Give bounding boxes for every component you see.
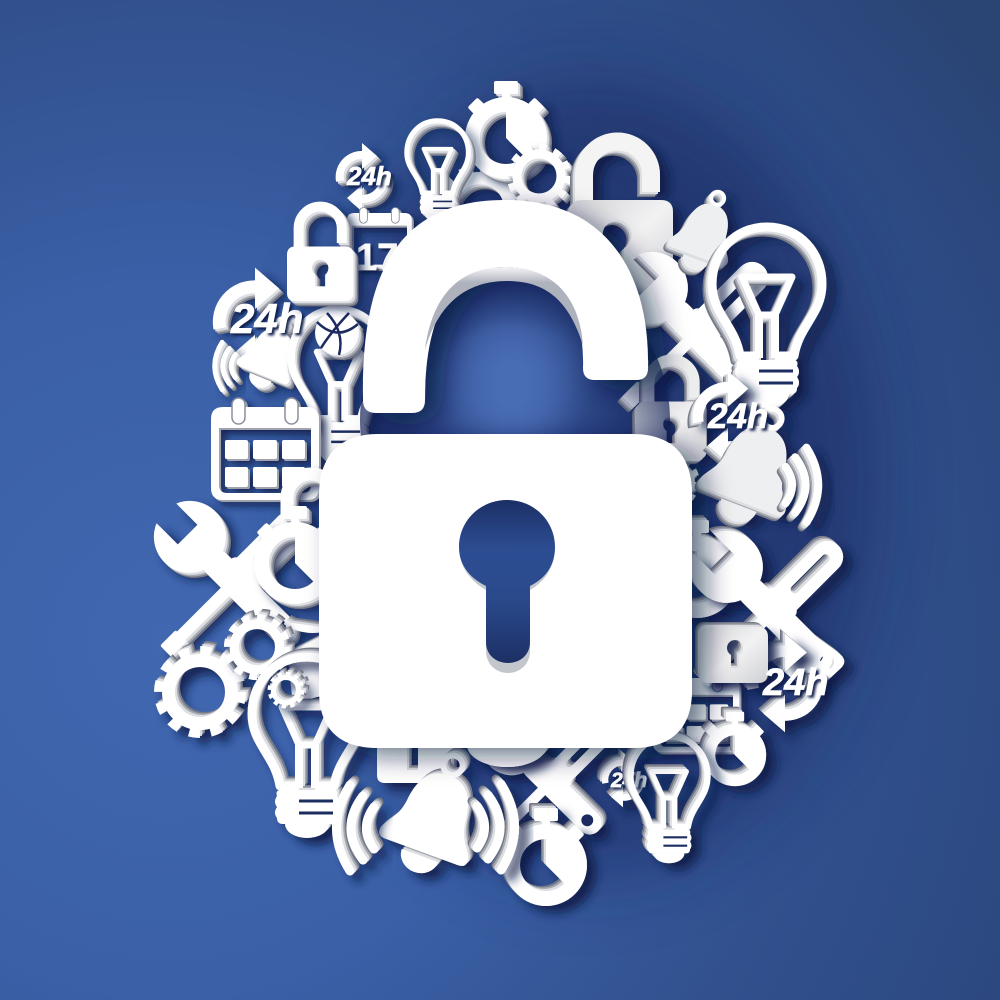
- icon: small lock top left: [287, 207, 353, 301]
- icon: gear medium lower left: [227, 617, 287, 677]
- icon: open lock top right: [570, 141, 673, 293]
- icon: 24h ring top: [340, 143, 384, 211]
- icon: gear top: [510, 147, 568, 205]
- icon: stopwatch lower right: [706, 712, 764, 780]
- cluster shadow: [305, 80, 875, 880]
- icon: 24h ring right: [698, 371, 758, 463]
- text: calendar date: 17: [356, 237, 398, 279]
- icon: tools right: [678, 518, 854, 695]
- icon: bell bottom: [370, 740, 500, 888]
- icon: calendar left: [211, 398, 319, 500]
- text: 24h top: 24h: [346, 161, 392, 191]
- icon: bulb lower left: [252, 657, 362, 838]
- padlock keyhole: [459, 500, 555, 673]
- icon: large gear top: [441, 169, 519, 247]
- icon: small gear behind right: [647, 457, 697, 507]
- icon: bell top right: [662, 181, 749, 280]
- padlock body: [319, 434, 692, 748]
- icon: small lock lower right: [700, 627, 768, 683]
- icon: sound waves right: [786, 448, 818, 522]
- shackle inner wall: [425, 267, 583, 350]
- icon: bulb bottom right: [630, 736, 708, 863]
- padlock shackle: [363, 200, 648, 413]
- icon: tools left: [141, 488, 317, 665]
- icon: white bump under lock: [467, 723, 547, 767]
- text: 24h bottom: 24h: [610, 769, 647, 792]
- icon: 24h ring lower right: [753, 634, 817, 732]
- icon: bulb left: [291, 309, 385, 463]
- icon: gear large lower left: [159, 651, 241, 733]
- icon: arcs lower left: [285, 622, 335, 700]
- main padlock: [319, 200, 692, 748]
- icon: sound waves bottom left: [336, 785, 374, 871]
- icon: small lock right: [637, 360, 707, 459]
- icon: globe in bulb: [315, 311, 359, 355]
- icon: sound waves left: [215, 342, 235, 390]
- icon: calendar lower right: [653, 671, 739, 752]
- icon: 24h ring bottom: [605, 753, 641, 807]
- shadow inside shackle: [360, 265, 670, 575]
- icon: large bulb right: [712, 227, 822, 408]
- icon: 24h ring left: [219, 268, 291, 376]
- icon: stopwatch left: [257, 506, 333, 596]
- icon: sound waves bottom right: [477, 784, 514, 870]
- icon: partial lock bottom: [377, 700, 452, 783]
- icon: tools bottom: [470, 703, 620, 853]
- icon: bulb top: [407, 121, 468, 222]
- icon: stopwatch top: [468, 81, 544, 172]
- icon: gear small lower left: [270, 674, 302, 706]
- text: 24h lower right: 24h: [762, 662, 828, 704]
- icon: tools upper right: [603, 239, 779, 416]
- icon: stopwatch right: [659, 520, 735, 610]
- icon: small calendar: [347, 208, 412, 269]
- icon: bell left: [231, 308, 310, 397]
- light glow inside shackle: [450, 310, 574, 460]
- icon: lock shackle behind left: [287, 474, 335, 530]
- text: 24h right: 24h: [707, 397, 768, 436]
- icon: bell right: [690, 393, 818, 537]
- icon: stopwatch bottom: [508, 808, 584, 898]
- text: 24h left: 24h: [230, 295, 303, 342]
